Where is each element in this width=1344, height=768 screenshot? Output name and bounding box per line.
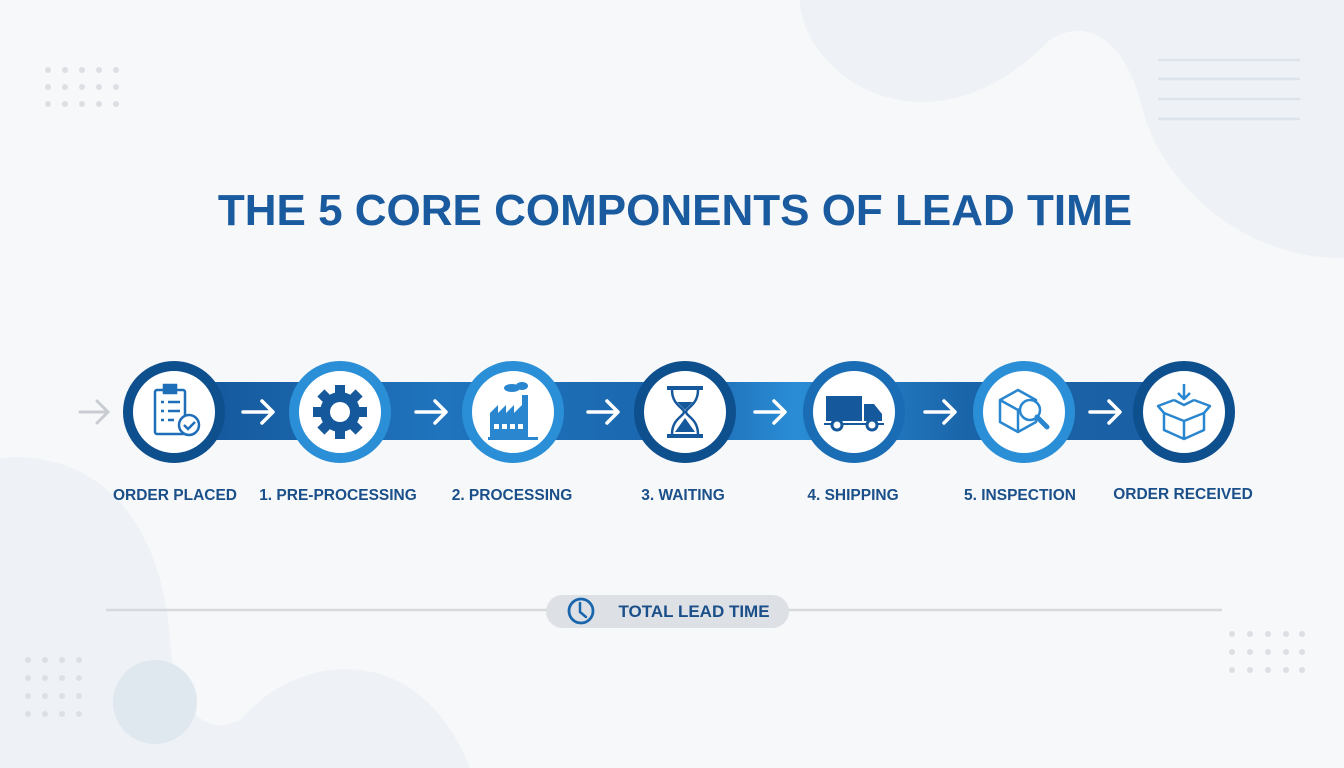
labels: ORDER PLACED [113,487,237,504]
icon: clipboard [155,385,199,435]
labels [113,486,1253,504]
timeline band [200,382,1160,440]
icon: hourglass [667,386,703,438]
step: processing [467,366,559,458]
total lead time pill: TOTAL LEAD TIME [618,602,770,621]
title: THE 5 CORE COMPONENTS OF LEAD TIME [218,186,1132,235]
icon: truck [824,396,884,430]
labels: 5. INSPECTION [964,487,1076,504]
labels: 2. PROCESSING [452,487,572,504]
icon: open box [1158,384,1210,439]
step: waiting [639,366,731,458]
total lead time line [106,609,1222,611]
labels: 3. WAITING [641,487,725,504]
total lead time pill [546,595,789,628]
step: shipping [808,366,900,458]
icon: box with magnifier [1000,390,1047,432]
arrows between steps [243,401,1120,423]
step: order placed [128,366,220,458]
arrow: start [80,401,108,423]
step: pre-processing [294,366,386,458]
labels: 4. SHIPPING [807,487,899,504]
step: inspection [978,366,1070,458]
icon: factory [488,382,538,440]
step: order received [1138,366,1230,458]
labels: 1. PRE-PROCESSING [259,487,417,504]
icon: gear [313,385,367,439]
labels: ORDER RECEIVED [1113,486,1253,503]
